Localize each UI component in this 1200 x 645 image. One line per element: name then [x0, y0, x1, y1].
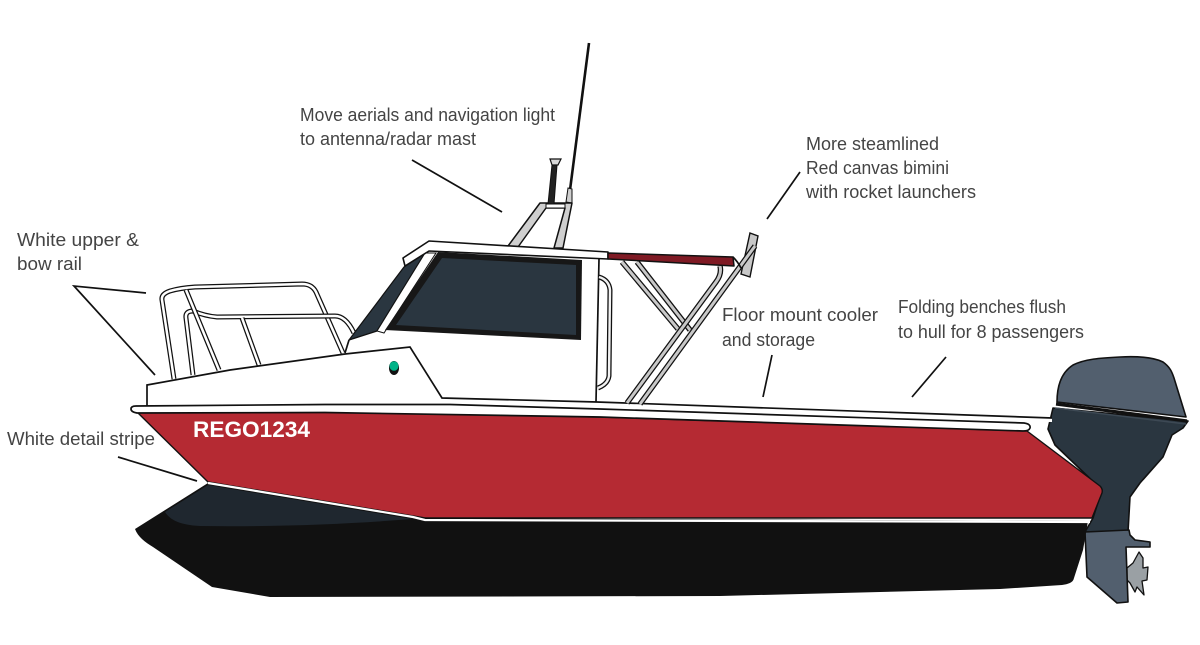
- boat illustration: [131, 43, 1188, 603]
- navigation light: [548, 159, 561, 204]
- callout: aerials: to antenna/radar mast: [300, 129, 476, 149]
- bimini frame: [622, 233, 758, 404]
- propeller: [1127, 552, 1148, 595]
- main windscreen: [385, 252, 582, 340]
- side window: [349, 253, 425, 340]
- callout: bimini: with rocket launchers: [805, 182, 976, 202]
- callout: cooler: and storage: [722, 330, 815, 350]
- callout: bow rail: bow rail: [17, 254, 82, 274]
- callout: detail stripe: White detail stripe: [7, 429, 155, 449]
- gunwale rail: [131, 404, 1030, 431]
- white pillar: [377, 253, 436, 333]
- lower unit: [1085, 530, 1150, 603]
- bow rail: [162, 284, 354, 379]
- cabin and foredeck: [147, 340, 1052, 422]
- motor body: [1048, 408, 1188, 532]
- outboard motor: [1048, 357, 1188, 603]
- dark bow shading: [165, 485, 412, 526]
- callout: aerials: Move aerials and navigation light: [300, 105, 555, 125]
- black lower hull: [135, 483, 1088, 597]
- red canvas bimini: [608, 253, 734, 266]
- motor cowling: [1057, 357, 1186, 417]
- antenna mast: [508, 43, 589, 248]
- cabin grab handle: [598, 277, 610, 388]
- callout: benches: [898, 297, 1084, 397]
- callout: detail stripe: [7, 429, 197, 481]
- red hull: [137, 412, 1102, 518]
- green navigation lamp: [389, 361, 399, 375]
- callout: bimini: Red canvas bimini: [806, 158, 949, 178]
- white detail stripe: [208, 483, 1090, 522]
- callout: bow rail: White upper &: [17, 230, 139, 250]
- callout: benches: Folding benches flush: [898, 297, 1066, 317]
- registration text: REGO1234: [193, 417, 311, 442]
- callout: bow rail: [17, 230, 155, 375]
- callout: aerials: [300, 105, 555, 212]
- callout: cooler: [722, 305, 878, 397]
- callout: cooler: Floor mount cooler: [722, 305, 878, 325]
- callout: bimini: More steamlined: [806, 134, 939, 154]
- callout: bimini: [767, 134, 976, 219]
- callout: benches: to hull for 8 passengers: [898, 322, 1084, 342]
- cabin roof: [403, 241, 608, 266]
- cabin wall and door line: [596, 259, 599, 402]
